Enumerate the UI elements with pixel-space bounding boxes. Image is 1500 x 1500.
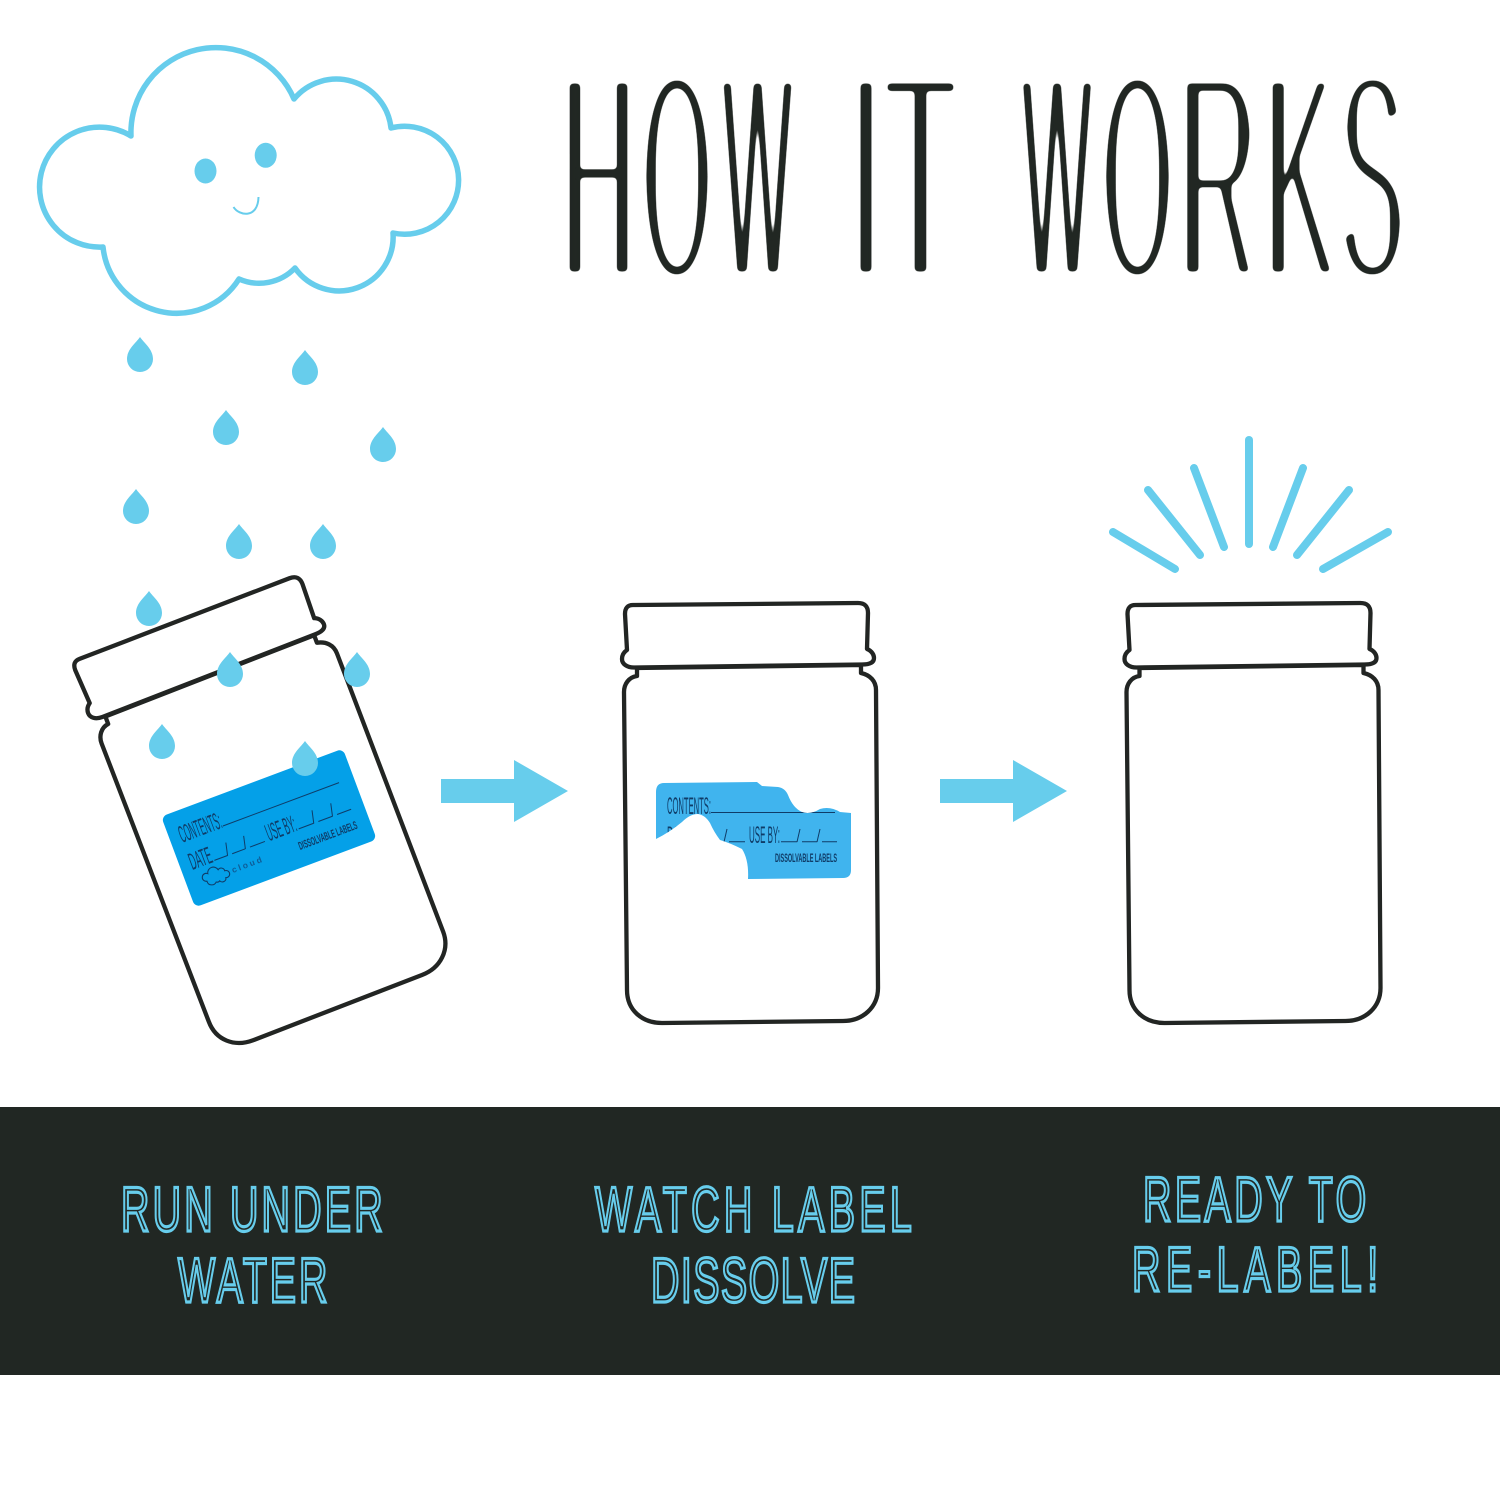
step 1 caption: RUN UNDER: [121, 1175, 383, 1245]
jar 3: clean jar: [1124, 603, 1380, 1023]
title: HOW IT WORKS: O: [1103, 14, 1172, 343]
icon: smiling cloud: [40, 48, 459, 313]
icon: shine rays above jar 3: [1113, 440, 1388, 569]
title: HOW IT WORKS: T: [885, 13, 956, 342]
jar 1: tilted jar under the rain: [69, 571, 455, 1054]
title: HOW IT WORKS: I: [851, 12, 881, 342]
step 2 caption: DISSOLVE: [651, 1246, 855, 1316]
title: HOW IT WORKS: K: [1264, 12, 1336, 342]
torn label on jar 2: USE BY:: [749, 822, 780, 849]
label logo: cloud wordmark: cloud: [230, 854, 265, 875]
title: HOW IT WORKS: H: [562, 12, 635, 342]
title: HOW IT WORKS: R: [1179, 13, 1257, 343]
label on jar 1: DATE: [185, 842, 216, 876]
torn label on jar 2: DATE: [667, 822, 690, 849]
title: HOW IT WORKS: W: [723, 11, 792, 342]
title: HOW IT WORKS: W: [1022, 11, 1092, 342]
title: HOW IT WORKS: S: [1340, 14, 1404, 342]
label on jar 1: CONTENTS:: [175, 808, 226, 848]
step 2 caption: [595, 1175, 912, 1316]
title: HOW IT WORKS: O: [643, 13, 711, 343]
step 1 caption: [121, 1175, 383, 1316]
step 3 caption: [1132, 1165, 1378, 1305]
label logo: cloud wordmark: [201, 854, 265, 886]
torn label on jar 2: DISSOLVABLE LABELS: [775, 853, 837, 865]
title: HOW IT WORKS: [562, 11, 1404, 343]
torn label on jar 2: [656, 782, 851, 879]
label on jar 1: DISSOLVABLE LABELS: [297, 820, 359, 853]
footer band: [0, 1107, 1500, 1375]
step 2 caption: WATCH LABEL: [595, 1175, 912, 1245]
torn label on jar 2: CONTENTS:: [667, 793, 711, 820]
step 3 caption: RE-LABEL!: [1132, 1235, 1378, 1305]
label on jar 1: [161, 749, 377, 907]
jar 2: label dissolving: [622, 603, 878, 1023]
rain drops: [123, 337, 396, 776]
step 3 caption: READY TO: [1143, 1165, 1366, 1235]
step 1 caption: WATER: [178, 1246, 327, 1316]
arrow 1: [441, 760, 568, 822]
label on jar 1: USE BY:: [262, 811, 300, 847]
arrow 2: [940, 760, 1067, 822]
